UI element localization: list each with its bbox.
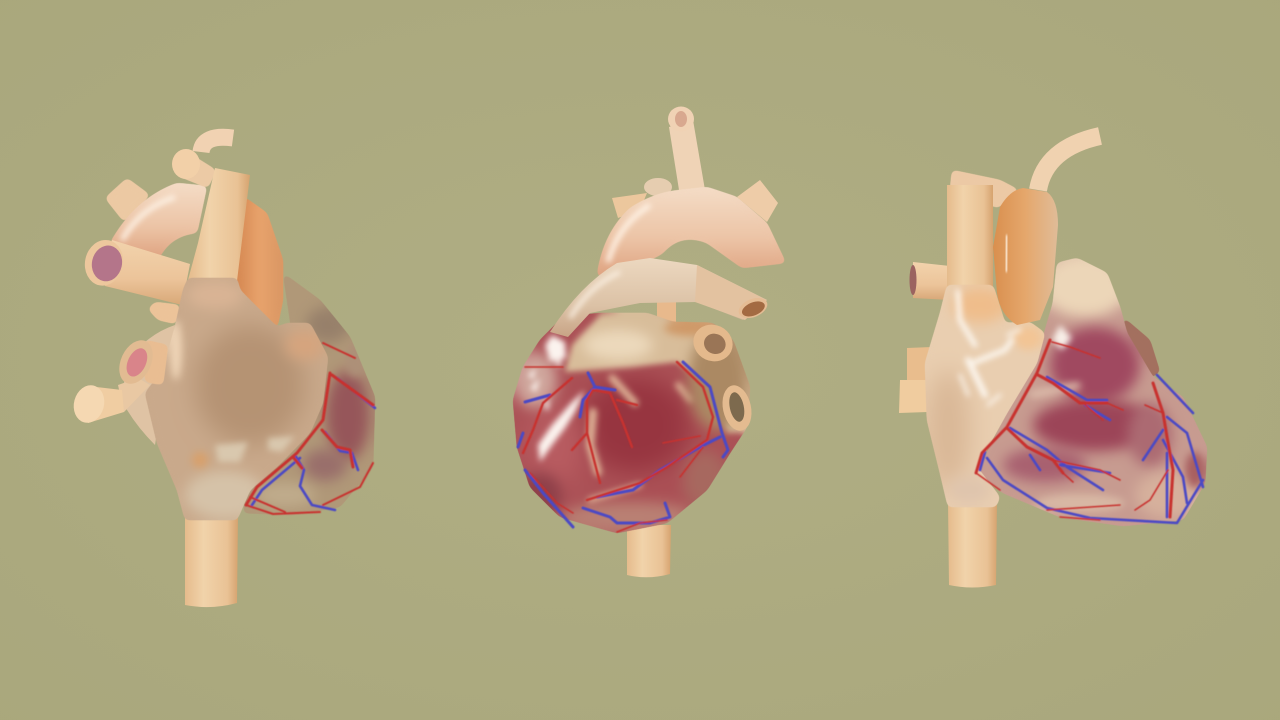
shading: atrium tones xyxy=(195,325,305,445)
highlights: white glossy patches xyxy=(528,335,585,462)
vessel: upper stub xyxy=(178,150,216,188)
ventricle xyxy=(980,258,1207,526)
vessel: back stub xyxy=(105,178,150,222)
atrium body xyxy=(924,284,1044,508)
highlight on pulmonary tube xyxy=(570,272,620,318)
tube opening: top branch xyxy=(668,106,694,132)
shading: atrium orange band xyxy=(664,320,716,336)
tube opening: upper stub xyxy=(172,149,200,179)
tube opening: left tube xyxy=(910,265,916,295)
tube opening: upper ring xyxy=(687,318,739,368)
shading: ventricle colour patches xyxy=(326,370,370,460)
tube end segment xyxy=(695,265,767,320)
side lobe xyxy=(1123,317,1160,378)
vessel: small rear stub xyxy=(148,302,180,324)
highlight on arch xyxy=(122,197,175,240)
vessel: thin top branch xyxy=(669,120,705,190)
pale muscle stripes xyxy=(590,378,690,500)
shading: muscle tones xyxy=(1050,327,1140,403)
vessel: pink-ended tube xyxy=(105,240,190,305)
vessel: neck of lower stub xyxy=(118,378,150,412)
shading: atrium right side xyxy=(688,330,748,430)
vessel: rear lobe xyxy=(123,325,175,445)
coronary vessels xyxy=(246,343,375,514)
vessel: orange bulge xyxy=(993,188,1058,325)
vessel: aortic arch xyxy=(110,183,207,262)
vessel: lower pale stub xyxy=(88,386,124,423)
heart: front view xyxy=(505,106,786,577)
shading: ventricle tones xyxy=(580,377,690,473)
heart: right side view xyxy=(899,136,1215,588)
tube opening: pulmonary end xyxy=(736,294,770,322)
vessel: inferior tube xyxy=(185,515,238,607)
coronary vessels xyxy=(518,362,728,532)
ventricle: rear view xyxy=(244,276,376,515)
vessel: left tube xyxy=(913,262,950,300)
highlight: top specular xyxy=(1052,325,1072,350)
vessel: ring stub xyxy=(145,340,168,385)
vessel: thin upper branch xyxy=(1038,136,1100,190)
heart body xyxy=(512,312,750,533)
coronary vessels xyxy=(976,340,1203,523)
vessel: pale tube xyxy=(188,168,250,281)
highlight on bulge xyxy=(1006,235,1007,272)
tube opening: lower ring xyxy=(719,383,755,433)
vessel: pale tube xyxy=(947,185,993,287)
vessel: inferior tube xyxy=(627,525,671,577)
illustration: three views of an anatomical heart xyxy=(74,106,1207,608)
atrium body xyxy=(146,278,328,520)
vessel: aortic arch xyxy=(597,187,786,280)
vessel: central trunk behind xyxy=(657,300,676,328)
cream top xyxy=(1050,258,1122,323)
atrium band xyxy=(565,311,752,433)
vessel: pulmonary tube xyxy=(550,258,767,337)
vessel: right stub xyxy=(737,180,778,222)
vessel: thin upper branch xyxy=(201,137,233,152)
highlight on arch xyxy=(608,205,650,262)
vessel: orange aorta xyxy=(236,196,283,329)
highlight: atrium left side xyxy=(583,330,653,360)
vessel: inferior tube xyxy=(948,500,997,588)
tube opening: pink lumen xyxy=(81,236,127,289)
tube opening: ring with pink lumen xyxy=(113,335,159,389)
highlights: glossy streaks xyxy=(958,292,1020,405)
heart: left side view xyxy=(70,137,380,607)
vessel: top rear stub xyxy=(950,170,1019,208)
vessel: left stubs xyxy=(899,347,932,413)
vessel: back stub and ball xyxy=(612,178,672,218)
tube opening lumen: top branch xyxy=(675,111,687,127)
tube opening: lower pale stub xyxy=(70,382,108,426)
pale stripe xyxy=(1030,385,1080,395)
pale mottled patches xyxy=(215,436,295,462)
shading: atrium tones xyxy=(926,370,970,490)
